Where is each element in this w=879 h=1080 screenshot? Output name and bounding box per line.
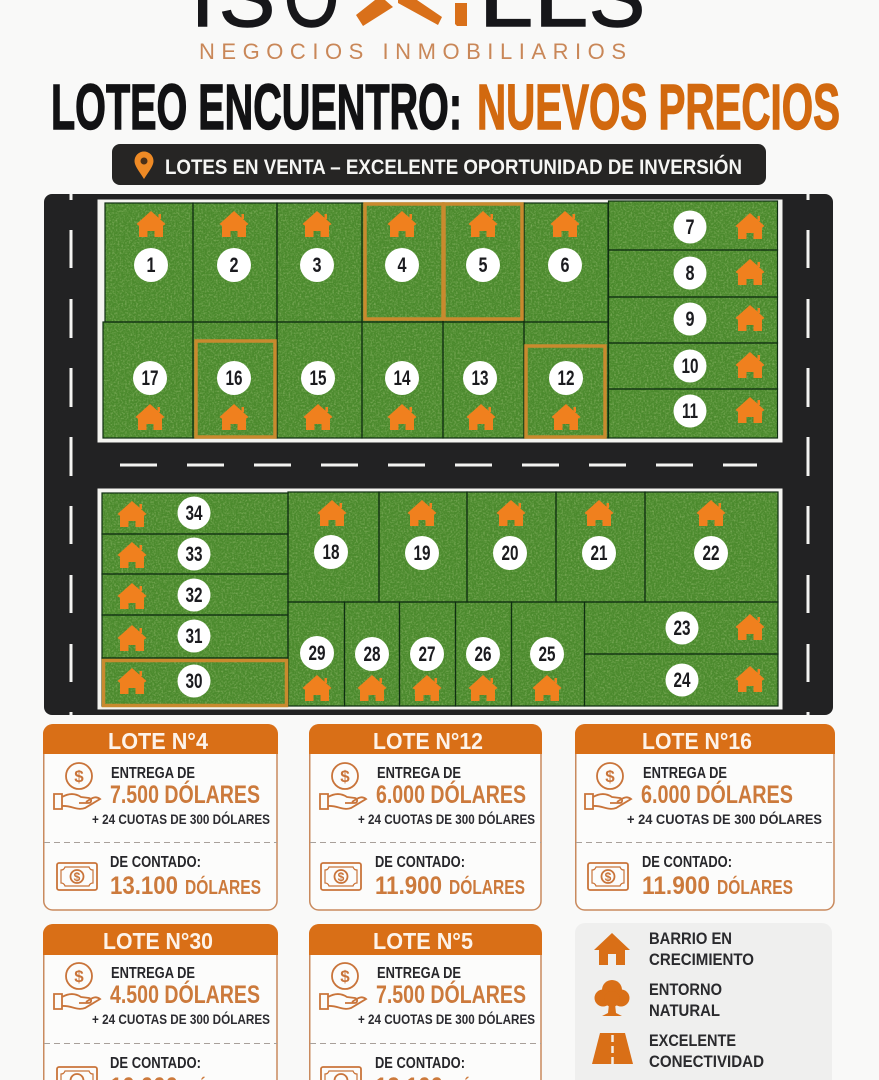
- lot 4: [362, 203, 443, 322]
- card: lote 12: DE CONTADO:: [375, 854, 465, 871]
- lot 24: [584, 654, 778, 706]
- legend: barrio en crecimiento: BARRIO EN: [649, 929, 732, 948]
- lot 11: [608, 389, 778, 438]
- logo: NEGOCIOS INMOBILIARIOS: [199, 39, 626, 64]
- lot 5: [443, 203, 524, 322]
- legend: entorno natural: NATURAL: [649, 1001, 720, 1020]
- lot 15: 15: [310, 367, 327, 390]
- logo: [191, 0, 645, 64]
- card: lote 12: + 24 CUOTAS DE 300 DÓLARES: [358, 812, 535, 827]
- lot 25: 25: [538, 643, 556, 666]
- lot 14: [362, 322, 443, 438]
- lot 33: 33: [186, 543, 202, 566]
- card: lote 4: LOTE N°4: [108, 728, 208, 754]
- lot 8: 8: [686, 262, 695, 285]
- card: lote 30: $: [74, 967, 84, 986]
- lot 26: 26: [474, 643, 492, 666]
- subtitle banner: LOTES EN VENTA – EXCELENTE OPORTUNIDAD DE INVERSIÓN: [165, 154, 742, 179]
- card: lote 12: [309, 724, 542, 910]
- lot 6: 6: [560, 254, 570, 277]
- lot 23: 23: [674, 617, 690, 640]
- card: lote 16: 6.000 DÓLARES: [641, 779, 793, 809]
- lot 15: [277, 322, 362, 438]
- card: lote 16: $: [605, 870, 612, 884]
- card: lote 4: 13.100: [110, 872, 178, 900]
- card: lote 16: DE CONTADO:: [642, 854, 732, 871]
- lot 10: 10: [682, 355, 698, 378]
- card: lote 5: + 24 CUOTAS DE 300 DÓLARES: [358, 1012, 535, 1027]
- lot 29: [288, 602, 344, 706]
- card: lote 30: LOTE N°30: [103, 928, 213, 954]
- card: lote 30: 4.500 DÓLARES: [110, 979, 260, 1009]
- legend: excelente conectividad: CONECTIVIDAD: [649, 1052, 764, 1071]
- card: lote 30: DE CONTADO:: [110, 1055, 201, 1072]
- title: LOTEO ENCUENTRO:: [51, 71, 462, 143]
- lot 2: [193, 203, 277, 322]
- legend: entorno natural: ENTORNO: [649, 980, 722, 999]
- lot 12: 12: [558, 367, 574, 390]
- subtitle banner: [112, 144, 766, 185]
- card: lote 30: ENTREGA DE: [111, 965, 195, 982]
- card: lote 12: ENTREGA DE: [377, 765, 461, 782]
- card: lote 4: [43, 724, 278, 910]
- lot 14: 14: [394, 367, 411, 390]
- card: lote 5: [309, 924, 542, 1080]
- lot 17: 17: [142, 367, 158, 390]
- lot 30: [102, 658, 288, 706]
- lot 32: [102, 574, 288, 615]
- card: lote 12: $: [340, 767, 350, 786]
- lot 32: 32: [186, 584, 202, 607]
- card: lote 4: 7.500 DÓLARES: [110, 779, 260, 809]
- lot 18: [288, 492, 379, 602]
- lot 25: [512, 602, 584, 706]
- lot 6: [524, 203, 608, 322]
- lot 26: [456, 602, 512, 706]
- card: lote 4: DE CONTADO:: [110, 854, 201, 871]
- card: lote 4: ENTREGA DE: [111, 765, 195, 782]
- card: lote 4: $: [74, 767, 84, 786]
- lot 30: 30: [186, 670, 202, 693]
- lot 16: 16: [226, 367, 242, 390]
- lot 31: [102, 615, 288, 658]
- lot 27: 27: [418, 643, 436, 666]
- lot 4: 4: [398, 254, 407, 277]
- card: lote 12: 11.900: [375, 872, 442, 900]
- lot 7: 7: [686, 216, 694, 239]
- lot 3: [277, 203, 362, 322]
- highlighted lots outline: [104, 204, 605, 706]
- card: lote 30: + 24 CUOTAS DE 300 DÓLARES: [92, 1012, 270, 1027]
- lot 28: 28: [364, 643, 381, 666]
- lot 17: [103, 322, 193, 438]
- card: lote 12: DÓLARES: [449, 875, 525, 899]
- card: lote 4: DÓLARES: [185, 875, 261, 899]
- legend: entorno natural: [594, 980, 722, 1020]
- lot 21: [556, 492, 645, 602]
- lot 19: 19: [414, 542, 430, 565]
- card: lote 5: DE CONTADO:: [375, 1055, 465, 1072]
- lot 29: 29: [308, 642, 326, 665]
- lot 21: 21: [590, 542, 608, 565]
- lot 20: [467, 492, 556, 602]
- lot 10: [608, 343, 778, 389]
- card: lote 5: LOTE N°5: [373, 928, 473, 954]
- lot 8: [608, 250, 778, 297]
- lot 31: 31: [186, 625, 203, 648]
- lot 18: 18: [322, 541, 340, 564]
- legend: barrio en crecimiento: [594, 929, 754, 969]
- lot 5: 5: [478, 254, 488, 277]
- lot 13: 13: [472, 367, 488, 390]
- lot 27: [400, 602, 456, 706]
- card: lote 4: $: [74, 870, 81, 884]
- card: lote 16: 11.900: [642, 872, 710, 900]
- lot 19: [379, 492, 467, 602]
- lot 20: 20: [502, 542, 518, 565]
- lot 23: [584, 602, 778, 654]
- lot 9: [608, 297, 778, 343]
- card: lote 5: ENTREGA DE: [377, 965, 461, 982]
- lot 1: 1: [146, 254, 156, 277]
- card: lote 30: [43, 924, 278, 1080]
- lot 16: [193, 322, 277, 438]
- card: lote 5: 7.500 DÓLARES: [376, 979, 526, 1009]
- road map panel: [44, 194, 833, 715]
- card: lote 16: ENTREGA DE: [643, 765, 727, 782]
- lot 24: 24: [674, 669, 691, 692]
- lot 13: [443, 322, 524, 438]
- card: lote 16: LOTE N°16: [642, 728, 752, 754]
- lot 12: [524, 322, 608, 438]
- lot 3: 3: [312, 254, 322, 277]
- lot 28: [344, 602, 400, 706]
- legend: excelente conectividad: EXCELENTE: [649, 1031, 736, 1050]
- card: lote 4: + 24 CUOTAS DE 300 DÓLARES: [92, 812, 270, 827]
- card: lote 16: DÓLARES: [717, 875, 793, 899]
- legend: excelente conectividad: [592, 1031, 764, 1071]
- lot 2: 2: [230, 254, 238, 277]
- card: lote 5: $: [340, 967, 350, 986]
- card: lote 16: + 24 CUOTAS DE 300 DÓLARES: [627, 812, 822, 827]
- lot 33: [102, 534, 288, 574]
- card: lote 16: $: [605, 767, 615, 786]
- lot 34: [102, 493, 288, 534]
- card: lote 16: [575, 724, 835, 910]
- lot 34: 34: [186, 502, 203, 525]
- lot 1: [105, 203, 193, 322]
- lot 9: 9: [686, 308, 694, 331]
- lot 22: [645, 492, 778, 602]
- lot 7: [608, 201, 778, 250]
- legend: barrio en crecimiento: CRECIMIENTO: [649, 950, 754, 969]
- card: lote 12: LOTE N°12: [373, 728, 483, 754]
- legend panel: [575, 923, 832, 1080]
- lot 22: 22: [702, 542, 720, 565]
- lot 11: 11: [682, 400, 698, 423]
- card: lote 12: 6.000 DÓLARES: [376, 779, 526, 809]
- card: lote 12: $: [338, 870, 345, 884]
